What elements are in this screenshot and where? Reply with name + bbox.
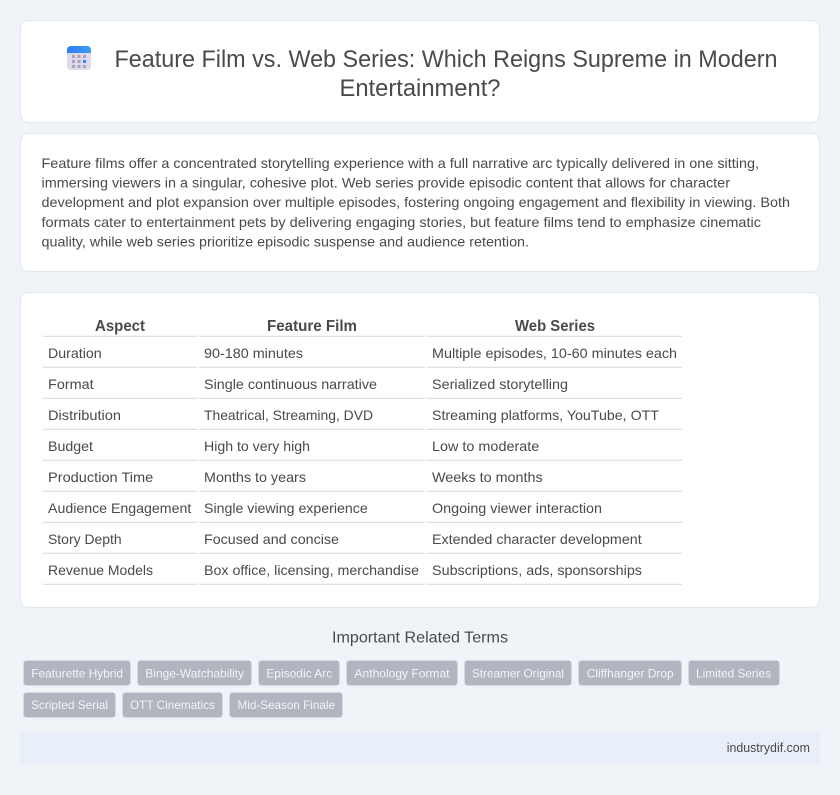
row: duration: 90-180 minutes bbox=[204, 345, 303, 361]
tag: Cliffhanger Drop: Cliffhanger Drop bbox=[587, 666, 674, 680]
tag: Streamer Original bbox=[464, 660, 572, 686]
row: distribution: Distribution bbox=[48, 407, 121, 423]
row: format: Single continuous narrative bbox=[204, 376, 377, 392]
row: budget: High to very high bbox=[204, 438, 310, 454]
heading: important related terms: Important Related Terms bbox=[332, 630, 508, 646]
related term tags bbox=[24, 660, 780, 718]
summary paragraph: development and plot expansion over multiple episodes, fostering ongoing engagement and flexibility in viewing. Both bbox=[42, 194, 790, 210]
summary paragraph: immersing viewers in a singular, cohesive plot. Web series provide episodic content that allows for character bbox=[42, 175, 730, 191]
panel: summary bbox=[20, 134, 820, 272]
table header bbox=[95, 318, 595, 335]
tag: Scripted Serial: Scripted Serial bbox=[31, 698, 108, 712]
row: revenue models: Revenue Models bbox=[48, 562, 153, 578]
row: format bbox=[48, 376, 568, 392]
row: audience engagement bbox=[48, 500, 602, 516]
row: production time: Weeks to months bbox=[432, 469, 543, 485]
title: Feature Film vs. Web Series: Which Reigns Supreme in Modern bbox=[114, 46, 778, 73]
row: audience engagement: Ongoing viewer interaction bbox=[432, 500, 602, 516]
tag: Cliffhanger Drop bbox=[578, 660, 682, 686]
tag: Streamer Original: Streamer Original bbox=[472, 666, 564, 680]
tag: Limited Series bbox=[688, 660, 780, 686]
table row rules bbox=[43, 336, 682, 585]
row: audience engagement: Audience Engagement bbox=[48, 500, 191, 516]
panel: title card bbox=[20, 20, 820, 122]
icon: calendar grid bbox=[67, 46, 91, 70]
row: duration bbox=[48, 345, 677, 361]
tag: Binge-Watchability bbox=[138, 660, 252, 686]
row: duration: Multiple episodes, 10-60 minutes each bbox=[432, 345, 677, 361]
summary paragraph: formats cater to entertainment pets by delivering engaging stories, but feature films tend to emphasize cinematic bbox=[42, 214, 761, 230]
table header: Web Series bbox=[515, 318, 595, 335]
tag: OTT Cinematics bbox=[122, 692, 222, 718]
row: audience engagement: Single viewing experience bbox=[204, 500, 368, 516]
row: story depth: Focused and concise bbox=[204, 531, 339, 547]
row: story depth: Extended character development bbox=[432, 531, 642, 547]
row: budget: Low to moderate bbox=[432, 438, 540, 454]
tag: Featurette Hybrid bbox=[24, 660, 130, 686]
row: distribution bbox=[48, 407, 659, 423]
row: production time: Production Time bbox=[48, 469, 154, 485]
row: duration: Duration bbox=[48, 345, 102, 361]
row: format: Serialized storytelling bbox=[432, 376, 568, 392]
summary paragraph: Feature films offer a concentrated storytelling experience with a full narrative arc typically delivered in one sitting, bbox=[42, 155, 759, 171]
summary paragraph: quality, while web series prioritize episodic suspense and audience retention. bbox=[42, 233, 529, 249]
row: revenue models bbox=[48, 562, 642, 578]
tag: Episodic Arc: Episodic Arc bbox=[266, 666, 332, 680]
tag: Anthology Format bbox=[346, 660, 458, 686]
tag: Mid-Season Finale: Mid-Season Finale bbox=[238, 698, 335, 712]
footer: industrydif.com bbox=[727, 740, 810, 755]
table header: Feature Film bbox=[267, 318, 357, 335]
row: budget bbox=[48, 438, 540, 454]
row: distribution: Theatrical, Streaming, DVD bbox=[204, 407, 373, 423]
table header: Aspect bbox=[95, 318, 146, 335]
tag: Binge-Watchability: Binge-Watchability bbox=[145, 666, 244, 680]
tag: OTT Cinematics: OTT Cinematics bbox=[130, 698, 215, 712]
title bbox=[114, 46, 778, 102]
tag: Featurette Hybrid: Featurette Hybrid bbox=[31, 666, 123, 680]
tag: Anthology Format: Anthology Format bbox=[354, 666, 450, 680]
tag: Scripted Serial bbox=[24, 692, 116, 718]
row: revenue models: Box office, licensing, merchandise bbox=[204, 562, 419, 578]
row: story depth: Story Depth bbox=[48, 531, 122, 547]
title: Entertainment? bbox=[340, 75, 500, 102]
row: story depth bbox=[48, 531, 642, 547]
tag: Limited Series: Limited Series bbox=[696, 666, 771, 680]
tag: Mid-Season Finale bbox=[230, 692, 342, 718]
row: revenue models: Subscriptions, ads, sponsorships bbox=[432, 562, 642, 578]
summary paragraph bbox=[42, 155, 790, 249]
row: budget: Budget bbox=[48, 438, 93, 454]
row: distribution: Streaming platforms, YouTube, OTT bbox=[432, 407, 659, 423]
footer bbox=[20, 731, 820, 765]
row: format: Format bbox=[48, 376, 94, 392]
panel: comparison table bbox=[20, 292, 820, 608]
tag: Episodic Arc bbox=[258, 660, 340, 686]
row: production time bbox=[48, 469, 543, 485]
row: production time: Months to years bbox=[204, 469, 306, 485]
